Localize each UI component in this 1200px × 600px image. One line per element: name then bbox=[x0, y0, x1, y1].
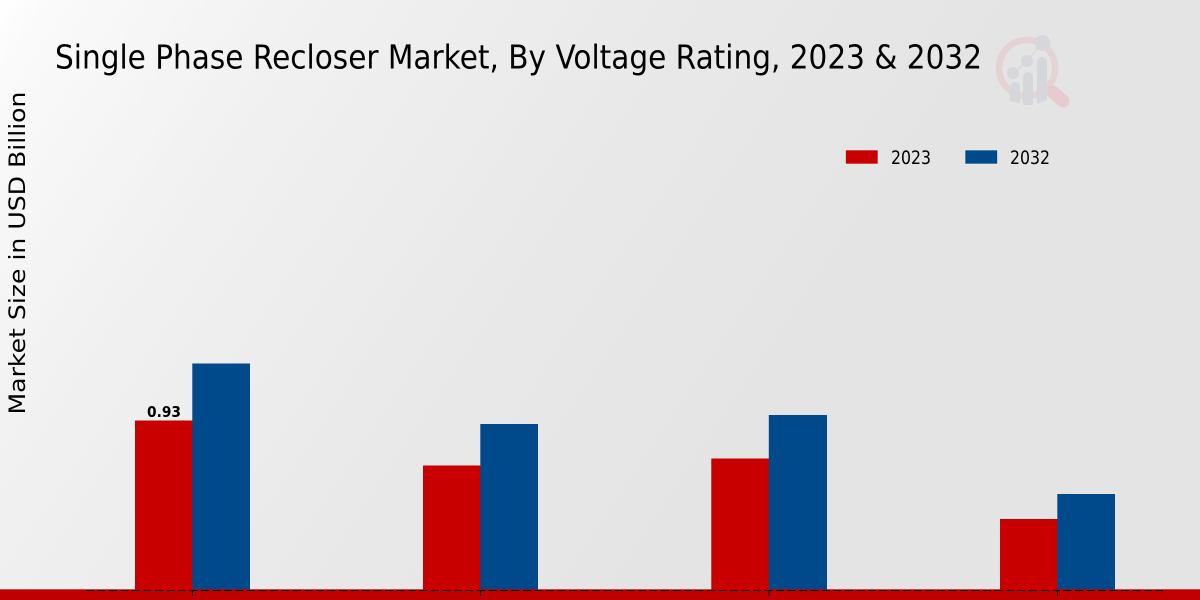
x axis bbox=[86, 590, 1163, 596]
bar group 1 bbox=[135, 364, 250, 590]
legend bbox=[846, 147, 1050, 169]
y axis label: Market Size in USD Billion bbox=[5, 92, 31, 414]
icon: watermark logo magnifier bbox=[999, 35, 1063, 105]
bar group 4 bbox=[1000, 494, 1115, 590]
title: Single Phase Recloser Market, By Voltage Rating, 2023 & 2032 bbox=[55, 38, 982, 76]
bar group 2 bbox=[423, 424, 538, 590]
legend item: 2032 bbox=[965, 147, 1050, 169]
bottom red band bbox=[0, 589, 1200, 600]
legend item: 2023: 2023 bbox=[891, 147, 931, 169]
bar group 3 bbox=[711, 415, 827, 590]
legend item: 2023 bbox=[846, 147, 931, 169]
data label: 0.93 bbox=[147, 403, 181, 421]
legend item: 2032: 2032 bbox=[1010, 147, 1050, 169]
